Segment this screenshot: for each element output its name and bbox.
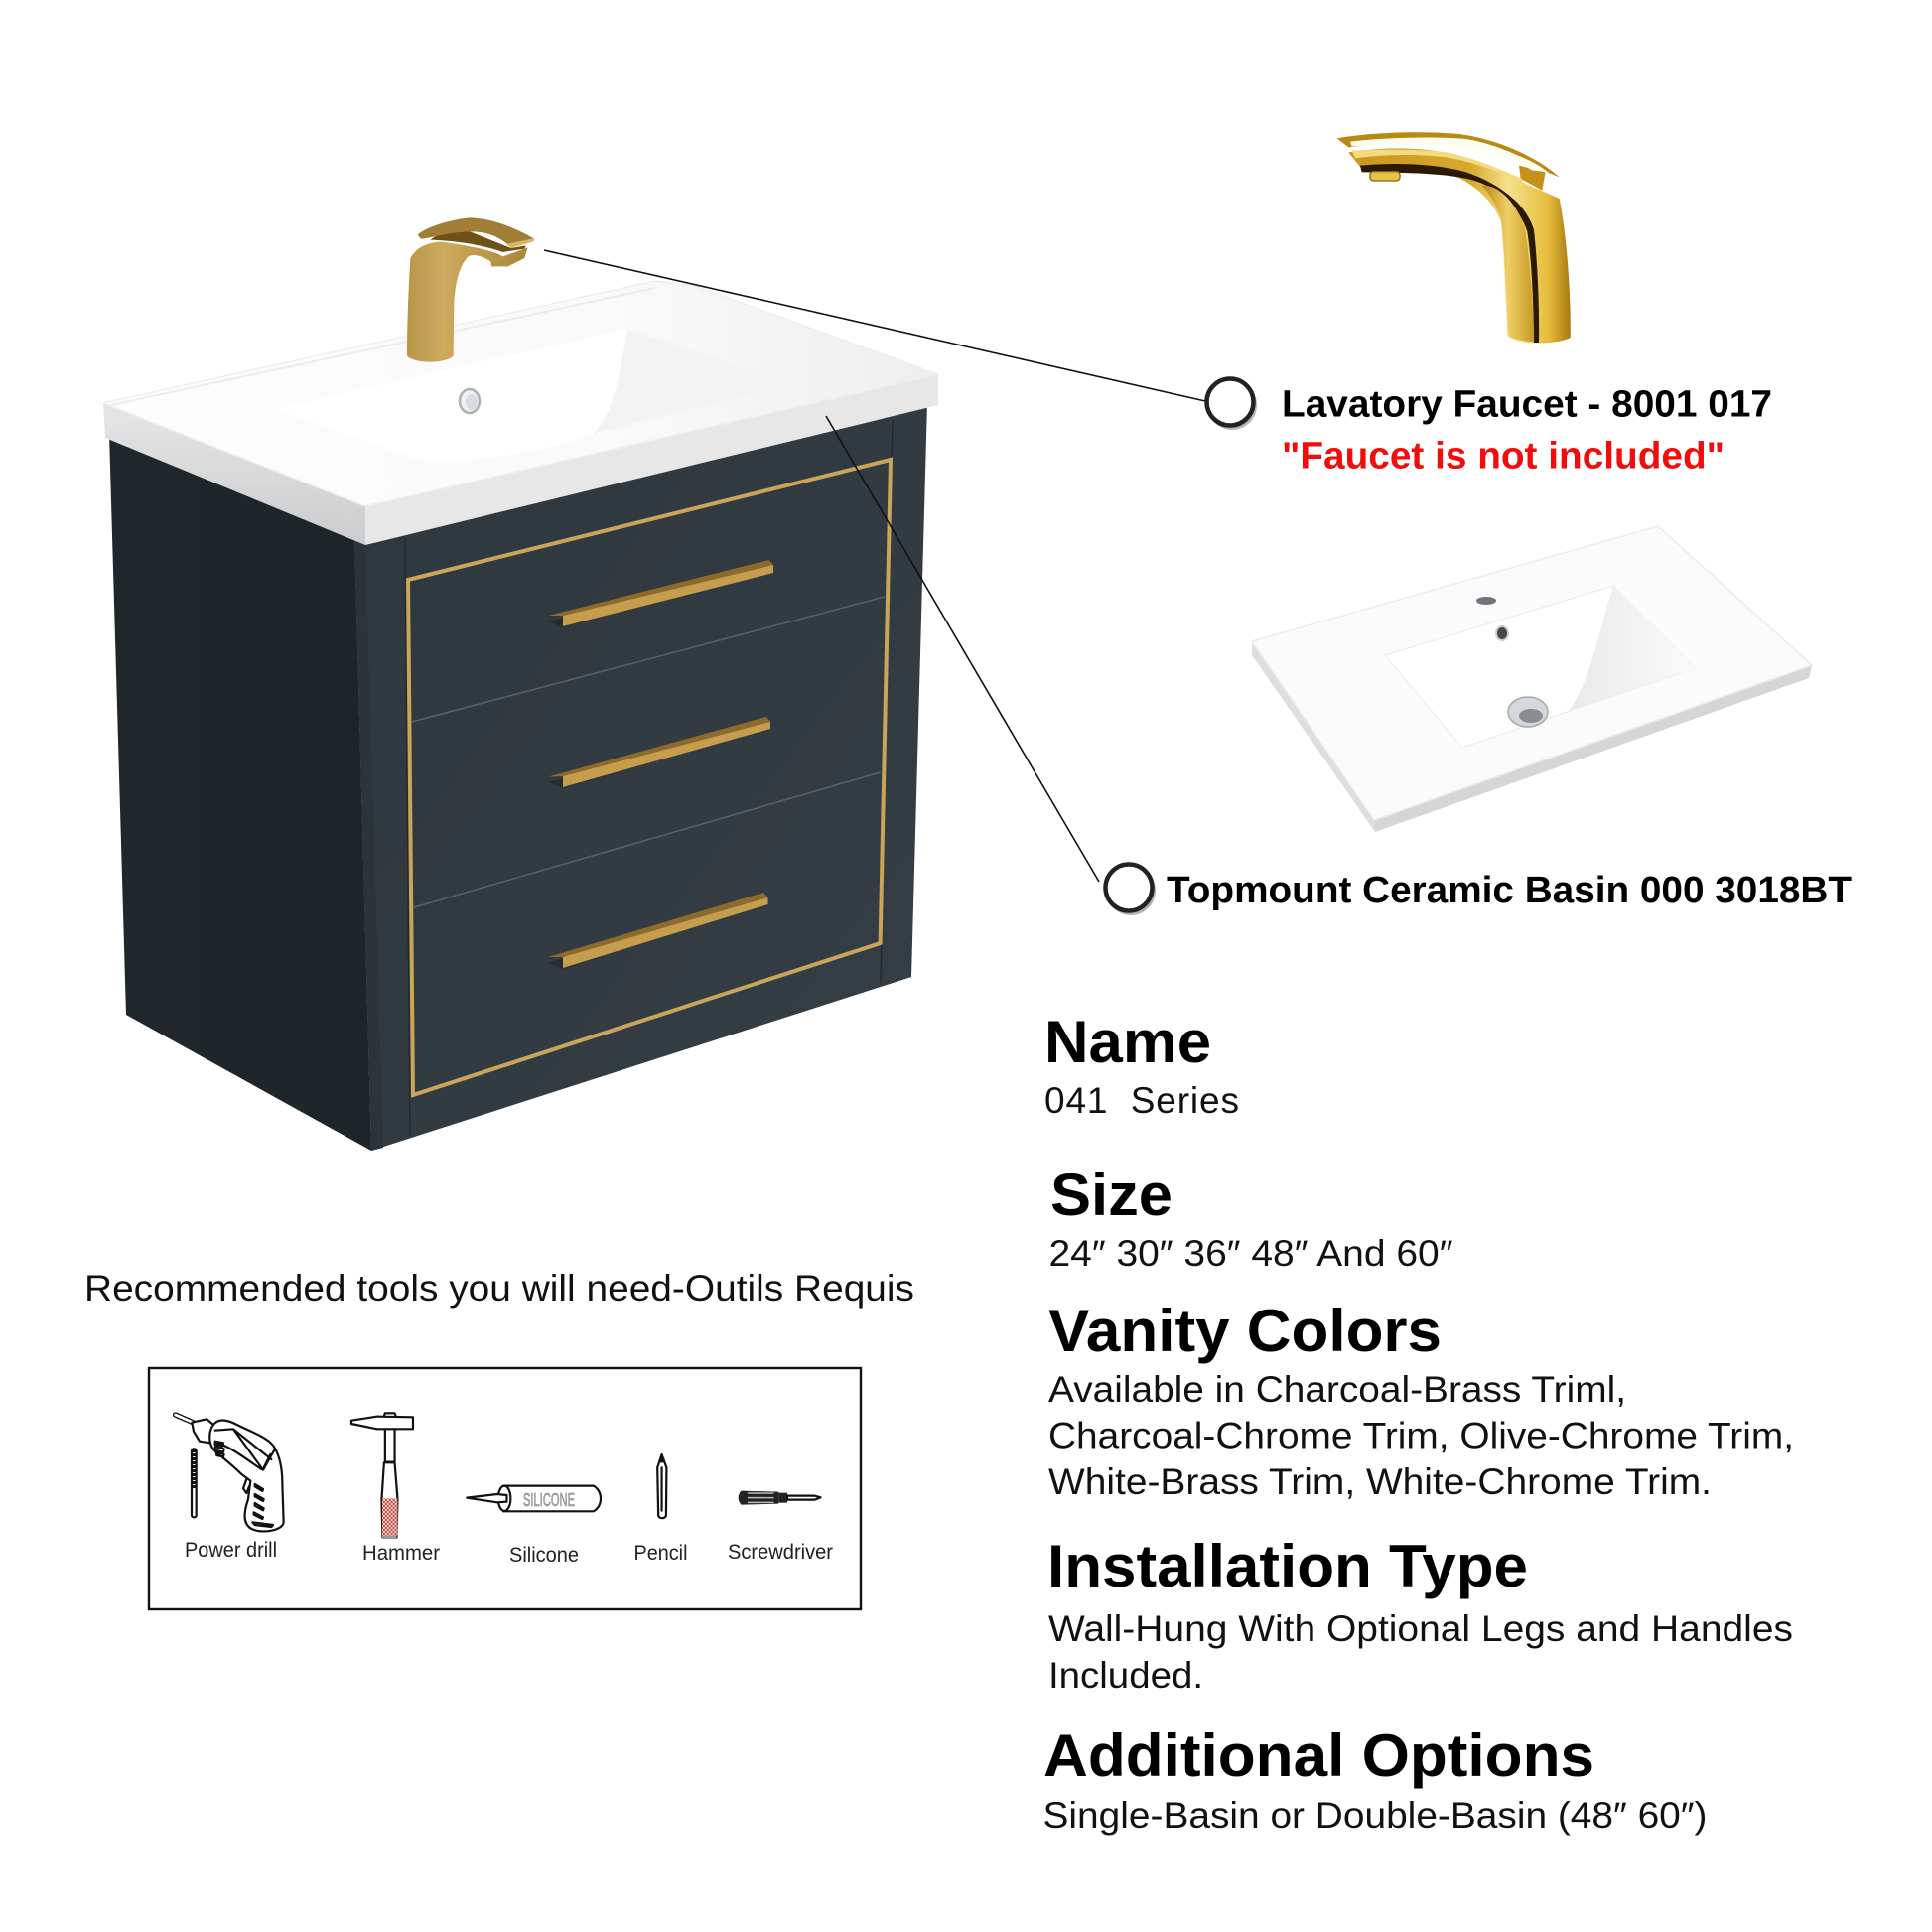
cabinet side panel bbox=[109, 433, 371, 1151]
leader line to faucet callout bbox=[544, 250, 1205, 401]
name value: 041 Series bbox=[1044, 1080, 1239, 1121]
name heading: Name bbox=[1044, 1009, 1211, 1075]
drawer handle bottom bbox=[548, 893, 768, 969]
countertop basin bbox=[103, 281, 938, 545]
brass trim frame bbox=[408, 460, 891, 1095]
additional options value: Single-Basin or Double-Basin (48″ 60″) bbox=[1042, 1795, 1708, 1836]
basin callout marker bbox=[1106, 864, 1154, 913]
silicone tube lettering: SILICONE bbox=[523, 1490, 575, 1510]
installation heading: Installation Type bbox=[1047, 1533, 1528, 1599]
cabinet front panel bbox=[354, 402, 927, 1151]
panel: recommended tools bbox=[149, 1368, 861, 1609]
drawer handle top bbox=[548, 560, 773, 627]
icon: power drill bbox=[176, 1415, 284, 1531]
spec: installation type bbox=[1047, 1533, 1793, 1696]
icon: screwdriver bbox=[739, 1491, 821, 1505]
vanity colors line 3: White-Brass Trim, White-Chrome Trim. bbox=[1048, 1461, 1712, 1502]
tools frame bbox=[149, 1368, 861, 1609]
faucet callout marker bbox=[1207, 379, 1255, 428]
faucet label: Lavatory Faucet - 8001 017 bbox=[1282, 383, 1772, 425]
additional options heading: Additional Options bbox=[1043, 1723, 1594, 1789]
ceramic basin product photo bbox=[1252, 526, 1812, 832]
faucet not included warning: "Faucet is not included" bbox=[1282, 435, 1725, 477]
label: hammer: Hammer bbox=[362, 1542, 440, 1565]
vanity faucet bbox=[407, 217, 534, 362]
vanity colors line 2: Charcoal-Chrome Trim, Olive-Chrome Trim, bbox=[1048, 1416, 1794, 1455]
tools heading: Recommended tools you will need-Outils Requis bbox=[84, 1268, 914, 1309]
spec: size bbox=[1048, 1162, 1453, 1274]
vanity colors heading: Vanity Colors bbox=[1048, 1298, 1442, 1364]
label: silicone: Silicone bbox=[509, 1544, 579, 1567]
label: screwdriver: Screwdriver bbox=[728, 1541, 833, 1564]
vanity colors line 1: Available in Charcoal-Brass Triml, bbox=[1048, 1369, 1626, 1410]
label: pencil: Pencil bbox=[633, 1542, 687, 1565]
drawer handle middle bbox=[548, 717, 770, 788]
installation line 2: Included. bbox=[1048, 1655, 1203, 1696]
label: power drill: Power drill bbox=[185, 1539, 277, 1562]
size value: 24″ 30″ 36″ 48″ And 60″ bbox=[1048, 1233, 1453, 1274]
spec: additional options bbox=[1042, 1723, 1708, 1836]
installation line 1: Wall-Hung With Optional Legs and Handles bbox=[1048, 1608, 1793, 1649]
vanity cabinet with sink bbox=[103, 217, 938, 1151]
spec: name bbox=[1044, 1009, 1239, 1121]
icon: silicone tube bbox=[467, 1486, 601, 1511]
gold faucet product photo bbox=[1337, 132, 1571, 343]
size heading: Size bbox=[1050, 1162, 1173, 1228]
leader line to basin callout bbox=[826, 416, 1099, 882]
icon: hammer bbox=[351, 1413, 413, 1539]
icon: pencil bbox=[657, 1454, 666, 1518]
basin label: Topmount Ceramic Basin 000 3018BT bbox=[1167, 870, 1852, 911]
spec: vanity colors bbox=[1048, 1298, 1794, 1502]
